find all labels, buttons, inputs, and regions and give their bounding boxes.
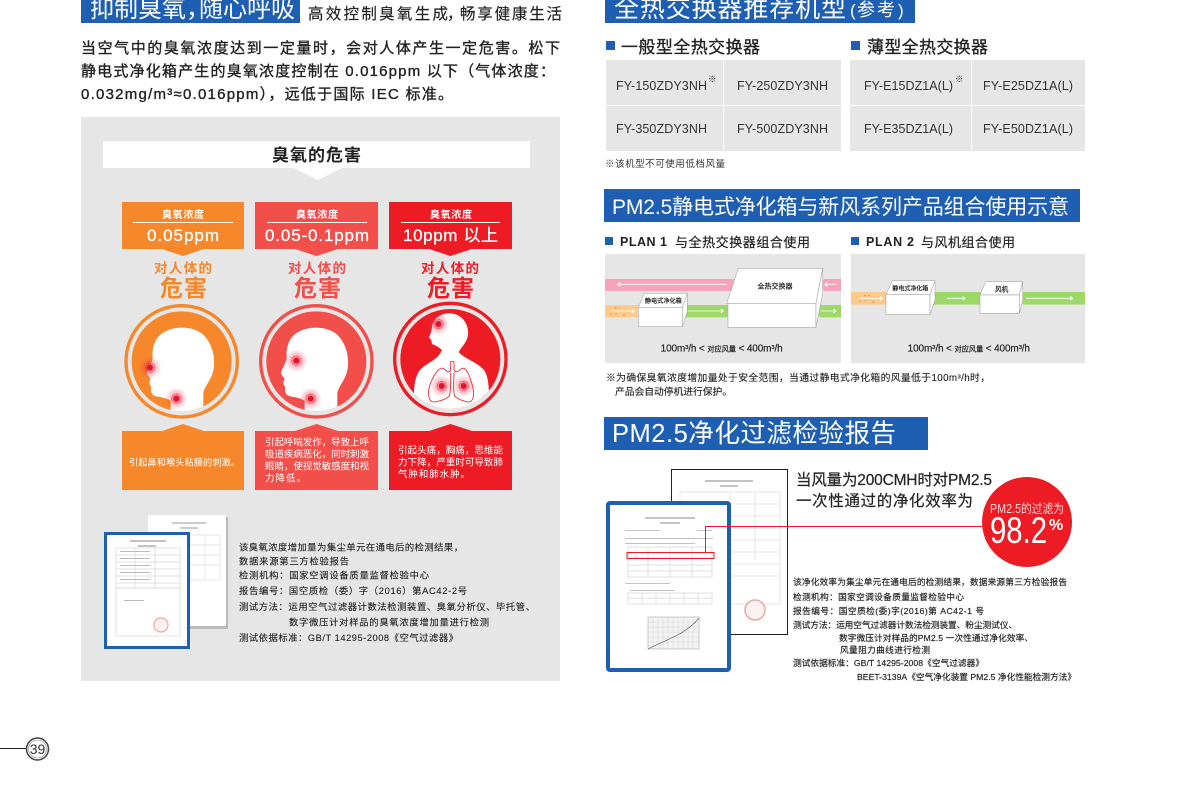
- filter efficiency heading: 一次性通过的净化效率为: [796, 492, 973, 510]
- harm description 2: 眼睛，使视觉敏感度和视: [265, 460, 369, 472]
- callout leader line and highlight: [627, 526, 985, 558]
- plan 2 heading: [851, 235, 1015, 250]
- ozone test report details: 数据来源第三方检验报告: [239, 556, 349, 566]
- left section subtitle: ，: [447, 6, 463, 23]
- model table: standard type: [606, 60, 841, 151]
- efficiency badge 98.2%: 98.2: [990, 510, 1047, 551]
- filter report details: [793, 576, 1076, 682]
- ozone test report details: 测试方法：运用空气过滤器计数法检测装置、臭氧分析仪、毕托管、: [239, 601, 535, 612]
- harm heading 2: 危害: [294, 275, 341, 301]
- safety note: ※为确保臭氧浓度增加量处于安全范围，当通过静电式净化箱的风量低于100m³/h时，: [606, 371, 990, 384]
- filter report details: 检测机构：国家空调设备质量监督检验中心: [793, 591, 964, 602]
- model table: standard type: FY-250ZDY3NH: [737, 79, 828, 93]
- model table: standard type: ※: [708, 74, 717, 84]
- model table: thin type: FY-E50DZ1A(L): [983, 122, 1073, 136]
- hazards title bar: 臭氧的危害: [272, 145, 361, 165]
- level card: 0.05-0.1ppm: 臭氧浓度: [296, 208, 338, 221]
- icon: body with head and lungs affected: [395, 303, 506, 415]
- harm description 2: [255, 424, 378, 490]
- harm description 3: 力下降，严重时可导致肺: [398, 456, 503, 468]
- level card: 10ppm: 10ppm 以上: [403, 226, 498, 245]
- level card: 0.05ppm: [122, 202, 244, 256]
- model table: thin type: [850, 60, 1085, 151]
- plan 1 heading: PLAN 1: [620, 235, 667, 249]
- section heading: filter test report: PM2.5净化过滤检验报告: [612, 420, 896, 448]
- left section subtitle: [308, 5, 562, 23]
- harm description 2: 力降低。: [265, 472, 306, 484]
- harm heading 3: [421, 260, 479, 301]
- plan 1 heading: 与全热交换器组合使用: [675, 235, 810, 250]
- ozone test report details: 数字微压计对样品的臭氧浓度增加量进行检测: [289, 616, 489, 628]
- harm heading 1: 对人体的: [154, 260, 212, 276]
- efficiency badge 98.2%: [982, 477, 1072, 567]
- box: total heat exchanger: [727, 268, 823, 327]
- model table: thin type: FY-E35DZ1A(L): [864, 122, 953, 136]
- left section subtitle: 高效控制臭氧生成: [308, 5, 448, 23]
- harm heading 2: 对人体的: [288, 260, 346, 276]
- filter report images: [608, 470, 788, 670]
- panel: ozone hazards: [81, 117, 560, 681]
- level card: 0.05-0.1ppm: 0.05-0.1ppm: [265, 226, 369, 245]
- model table: thin type: FY-E25DZ1A(L): [983, 79, 1073, 93]
- filter report details: 风量阻力曲线进行检测: [840, 644, 930, 655]
- intro paragraph: 静电式净化箱产生的臭氧浓度控制在 0.016ppm 以下（气体浓度：: [81, 63, 555, 80]
- intro paragraph: 当空气中的臭氧浓度达到一定量时，会对人体产生一定危害。松下: [81, 40, 560, 57]
- model table: standard type: FY-500ZDY3NH: [737, 122, 828, 136]
- plan 2 heading: 与风机组合使用: [921, 235, 1015, 250]
- model table: thin type: FY-E15DZ1A(L): [864, 79, 953, 93]
- harm heading 1: 危害: [160, 275, 207, 301]
- ozone test report details: 该臭氧浓度增加量为集尘单元在通电后的检测结果，: [239, 542, 463, 552]
- subheading: thin type: 薄型全热交换器: [867, 38, 988, 57]
- model table: standard type: FY-350ZDY3NH: [616, 122, 707, 136]
- level card: 0.05-0.1ppm: [255, 202, 378, 256]
- safety note: [606, 371, 990, 398]
- harm heading 3: 对人体的: [421, 260, 479, 276]
- clean air bands: [931, 292, 1085, 305]
- right section heading: recommended models: 参考: [857, 0, 895, 20]
- harm description 3: 引起头痛，胸痛，思维能: [398, 444, 503, 456]
- box: electrostatic purifier: [886, 281, 935, 314]
- filter report details: 报告编号：国空质检(委)字(2016)第 AC42-1 号: [793, 605, 984, 616]
- harm heading 2: [288, 260, 346, 301]
- icon: head with nose and throat irritation: [126, 306, 237, 417]
- level card: 10ppm: [389, 202, 512, 256]
- section heading: combination diagrams: PM2.5静电式净化箱与新风系列产品组合使用示意: [612, 196, 1069, 219]
- filter report details: 该净化效率为集尘单元在通电后的检测结果，数据来源第三方检验报告: [793, 576, 1067, 587]
- harm description 2: 吸道疾病恶化，同时刺激: [265, 448, 369, 460]
- box: fan: 风机: [995, 284, 1009, 293]
- filter report details: 测试依据标准：GB/T 14295-2008《空气过滤器》: [793, 657, 984, 668]
- harm description 3: [389, 424, 512, 490]
- harm description 3: 气肿和肺水肿。: [398, 468, 470, 480]
- ozone test report details: 测试依据标准：GB/T 14295-2008《空气过滤器》: [239, 632, 458, 643]
- box: total heat exchanger: 全热交换器: [758, 282, 792, 291]
- model table: standard type: FY-150ZDY3NH: [616, 79, 707, 93]
- box: electrostatic purifier: 静电式净化箱: [645, 297, 682, 305]
- performance curve thumbnail: [648, 617, 699, 649]
- airflow range: 100m³/h < 对应风量 < 400m³/h: [661, 344, 783, 355]
- clean air bands: [684, 305, 841, 317]
- filter report details: BEET-3139A《空气净化装置 PM2.5 净化性能检测方法》: [857, 671, 1076, 682]
- model footnote: ※该机型不可使用低档风量: [605, 158, 725, 170]
- level card: 0.05ppm: 臭氧浓度: [162, 208, 204, 221]
- left section heading: [81, 0, 300, 23]
- ozone test report details: 报告编号：国空质检（委）字（2016）第AC42-2号: [239, 585, 467, 596]
- harm heading 1: [154, 260, 212, 301]
- hazards title bar: [103, 141, 530, 180]
- diagram: plan 1: [605, 254, 841, 363]
- harm heading 3: 危害: [427, 275, 474, 301]
- ozone test report images: [106, 515, 228, 648]
- page number: 39: [30, 741, 45, 757]
- airflow range: 100m³/h < 对应风量 < 400m³/h: [908, 344, 1030, 355]
- harm description 2: 引起呼喘发作，导致上呼: [265, 436, 369, 448]
- box: electrostatic purifier: [638, 293, 687, 327]
- intro paragraph: 0.032mg/m³≈0.016ppm），远低于国际 IEC 标准。: [81, 86, 453, 103]
- page number: [0, 738, 48, 760]
- right section heading: recommended models: ): [898, 1, 904, 20]
- icon: head with eye and throat irritation: [261, 306, 372, 417]
- plan 1 heading: [605, 235, 810, 250]
- ozone test report details: [239, 542, 535, 643]
- ozone test report details: 检测机构：国家空调设备质量监督检验中心: [239, 570, 429, 580]
- filter efficiency heading: [796, 471, 992, 510]
- left section subtitle: 畅享健康生活: [460, 5, 562, 23]
- subheading: standard type: 一般型全热交换器: [621, 38, 760, 57]
- filter efficiency heading: 当风量为200CMH时对PM2.5: [796, 471, 992, 489]
- harm description 1: 引起鼻和喉头粘膜的刺激。: [129, 456, 240, 468]
- exhaust air band: [605, 279, 841, 291]
- harm description 1: [122, 424, 244, 490]
- model table: thin type: ※: [955, 74, 964, 84]
- efficiency badge 98.2%: %: [1049, 517, 1063, 534]
- safety note: 产品会自动停机进行保护。: [615, 385, 732, 398]
- section heading: combination diagrams: [604, 189, 1080, 222]
- filter report details: 测试方法：运用空气过滤器计数法检测装置、粉尘测试仪、: [793, 619, 1017, 630]
- level card: 0.05ppm: 0.05ppm: [147, 226, 219, 245]
- box: fan: [980, 282, 1023, 313]
- intro paragraph: [81, 40, 560, 103]
- box: electrostatic purifier: 静电式净化箱: [892, 284, 928, 292]
- level card: 10ppm: 臭氧浓度: [430, 208, 472, 221]
- efficiency badge 98.2%: PM2.5的过滤为: [990, 501, 1064, 516]
- diagram: plan 2: [851, 254, 1085, 363]
- polluted intake band: [605, 305, 639, 317]
- plan 2 heading: PLAN 2: [866, 235, 914, 249]
- filter report details: 数字微压计对样品的PM2.5 一次性通过净化效率、: [839, 632, 1033, 643]
- polluted intake band: [851, 292, 887, 305]
- right section heading: recommended models: (: [850, 1, 856, 20]
